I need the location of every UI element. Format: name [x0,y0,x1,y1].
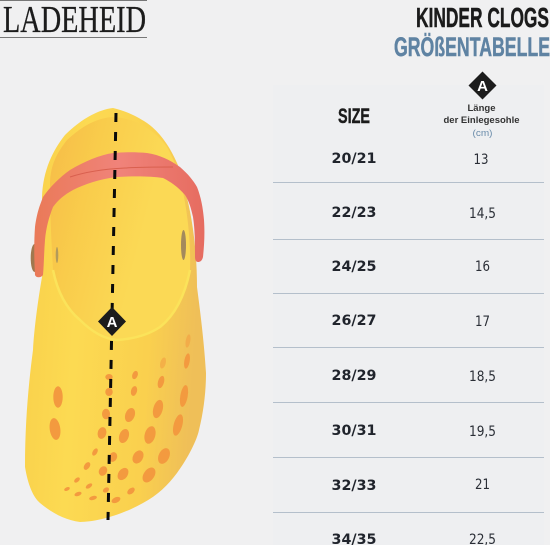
table background [273,85,544,545]
size column: 22/23 [332,205,376,221]
length column: 14,5 [469,206,496,222]
size column: 28/29 [332,368,376,384]
length column: 13 [474,152,488,168]
size column: 30/31 [332,423,376,439]
clog ventilation holes [48,334,191,504]
rivet left [31,244,38,272]
clog body [25,108,206,522]
marker A on clog [98,307,126,336]
length column: 21 [475,477,490,493]
brand logo: LADEHEID: LADEHEID [3,0,146,41]
marker A on clog: A [107,314,118,331]
size column: 32/33 [332,478,376,494]
size column [332,151,376,545]
strap [34,152,204,277]
length column: 17 [475,314,490,330]
size column: 26/27 [332,313,376,329]
length column: 16 [475,259,490,275]
measuring line A [108,113,116,520]
clog opening [50,117,190,340]
table header: Size: SIZE [338,104,370,128]
strap ridge [70,167,173,177]
size column: 20/21 [332,151,376,167]
table rows [273,151,544,545]
opening rim [53,270,190,340]
label: Länge [468,103,496,113]
unit: (cm) [472,128,492,138]
length column: 19,5 [469,424,496,440]
table header: length column [444,72,520,138]
length column: 18,5 [469,369,496,385]
rivet right [181,230,186,260]
size column: 24/25 [332,259,376,275]
label line 2: der Einlegesohle [444,115,520,125]
small side hole [56,247,58,263]
illustration: yellow clog [25,108,206,522]
length column [469,152,496,545]
marker A: A [477,78,488,95]
